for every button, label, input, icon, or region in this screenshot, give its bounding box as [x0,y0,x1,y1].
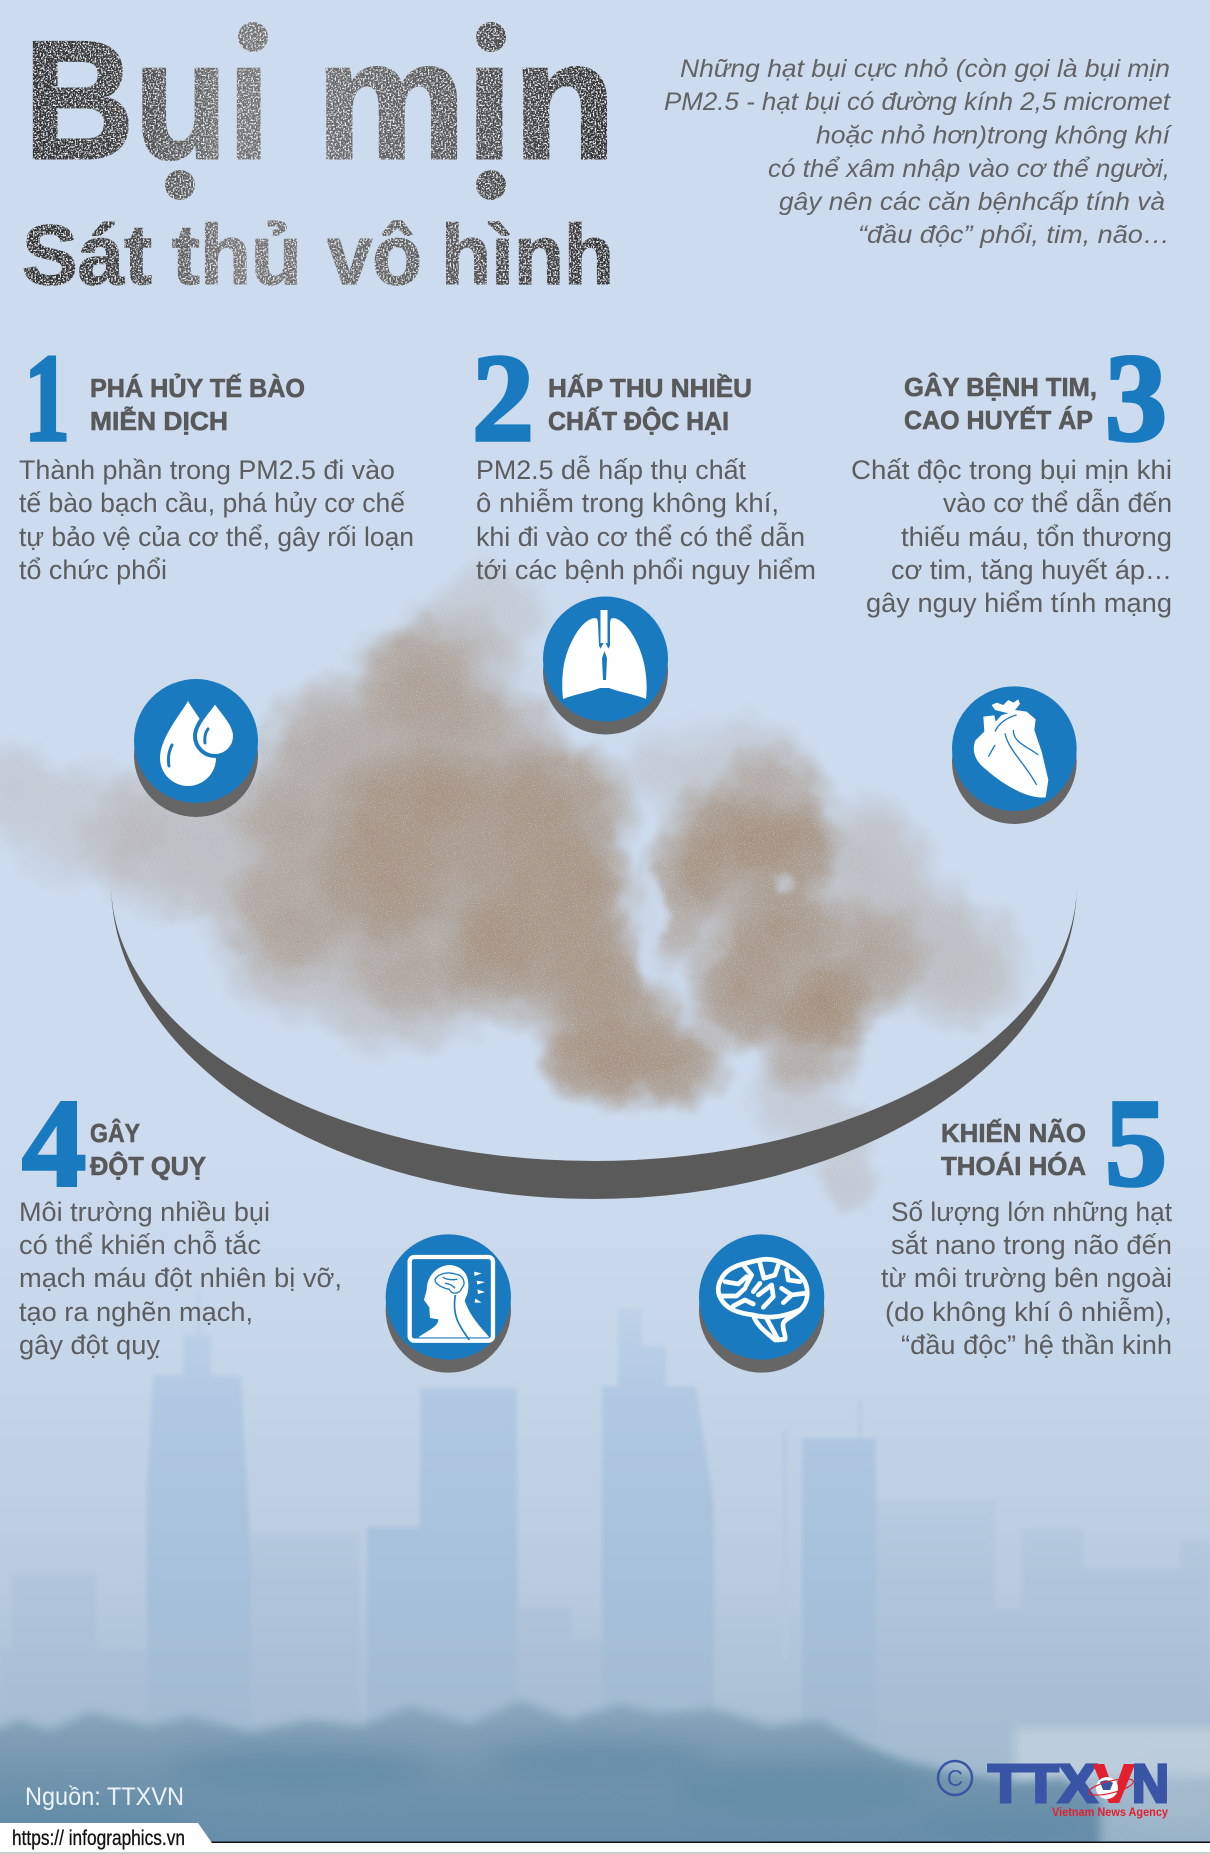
text 5: từ môi trường bên ngoài [881,1263,1172,1293]
heading 5 [941,1118,1086,1181]
icon: water drops [134,679,258,817]
heading 5: KHIẾN NÃO [941,1118,1086,1148]
title line 2: Sát [22,208,152,302]
text 1: tổ chức phổi [19,555,167,585]
heading 3: CAO HUYẾT ÁP [904,405,1093,435]
text 4: có thể khiến chỗ tắc [19,1229,261,1260]
text 3: cơ tim, tăng huyết áp… [891,555,1172,585]
copyright mark [938,1761,972,1795]
title line 1: mịn [316,6,616,194]
heading 3: GÂY BỆNH TIM, [904,372,1097,402]
item 3: heart disease [851,330,1172,618]
intro paragraph: hoặc nhỏ hơn)trong không khí [816,122,1172,150]
intro paragraph: có thể xâm nhập vào cơ thể người, [768,155,1170,183]
heading 1: PHÁ HỦY TẾ BÀO [90,372,305,403]
icon: brain [699,1234,824,1373]
icon: lungs [543,596,668,734]
intro paragraph: PM2.5 - hạt bụi có đường kính 2,5 micromet [664,88,1171,116]
text 1: tế bào bạch cầu, phá hủy cơ chế [19,488,405,518]
title [24,22,610,286]
icon: heart [952,686,1077,824]
text 1 [19,455,414,585]
number 1: 1 [24,330,70,468]
heading 4 [90,1118,206,1181]
number 3: 3 [1105,330,1167,468]
background: treeline and river [0,1700,1210,1854]
intro paragraph [664,55,1172,249]
text 3: vào cơ thể dẫn đến [943,487,1172,518]
text 3: gây nguy hiểm tính mạng [866,588,1172,618]
title line 1: Bụi [24,6,270,194]
dust cloud [0,555,1035,1215]
text 3 [851,455,1172,618]
title line 1 [32,22,608,200]
text 2: PM2.5 dễ hấp thụ chất [476,454,746,485]
text 3: thiếu máu, tổn thương [901,522,1172,552]
heading 1 [90,372,305,436]
url text: https:// infographics.vn [12,1827,185,1850]
heading 2 [548,373,752,436]
text 1: tự bảo vệ của cơ thể, gây rối loạn [19,522,414,552]
text 5: Số lượng lớn những hạt [891,1197,1172,1227]
text 2 [476,454,816,585]
text 4: mạch máu đột nhiên bị vỡ, [19,1263,342,1293]
text 4: Môi trường nhiều bụi [19,1197,270,1227]
item 1: destroys immune cells [19,330,414,585]
text 1: Thành phần trong PM2.5 đi vào [19,455,395,485]
text 2: khi đi vào cơ thể có thể dẫn [476,521,805,552]
text 4 [19,1197,342,1360]
intro paragraph: “đầu độc” phổi, tim, não… [858,221,1170,249]
item 2: absorbs toxins [472,330,816,585]
wordmark: TTX [988,1754,1097,1814]
logo: TTXVN: V [1094,1754,1134,1814]
heading 2: HẤP THU NHIỀU [548,373,752,403]
text 3: Chất độc trong bụi mịn khi [851,455,1172,485]
text 2: tới các bệnh phổi nguy hiểm [476,555,816,585]
curved bowl arc [111,883,1077,1199]
logo: TTXVN: C [947,1765,963,1791]
logo: TTXVN [938,1754,1169,1819]
heading 2: CHẤT ĐỘC HẠI [548,406,729,436]
background: hazy city skyline [0,1290,1210,1744]
number 2: 2 [472,330,534,468]
title line 2: hình [441,208,614,302]
globe [1096,1777,1118,1799]
heading 5: THOÁI HÓA [941,1151,1086,1181]
url tag [0,1823,212,1852]
icon: head with stroke scan [386,1234,511,1373]
heading 3 [904,372,1097,435]
heading 4: GÂY [90,1118,140,1148]
tagline: Vietnam News Agency [1052,1805,1168,1819]
text 4: tạo ra nghẽn mạch, [19,1297,253,1327]
intro paragraph: Những hạt bụi cực nhỏ (còn gọi là bụi mịn [680,55,1170,83]
text 5: sắt nano trong não đến [891,1229,1172,1260]
text 5: “đầu độc” hệ thần kinh [901,1330,1172,1360]
text 5 [881,1197,1172,1360]
number 4: 4 [22,1075,86,1213]
text 5: (do không khí ô nhiễm), [885,1296,1172,1327]
item 4: stroke [19,1075,342,1360]
text 4: gây đột quỵ [19,1330,160,1360]
text 2: ô nhiễm trong không khí, [476,487,779,518]
title line 2 [22,208,614,302]
title line 2: thủ [172,208,302,302]
heading 1: MIỄN DỊCH [90,406,228,436]
intro paragraph: gây nên các căn bệnhcấp tính và [779,188,1165,216]
title line 2: vô [327,208,422,302]
item 5: brain degeneration [881,1075,1172,1360]
footer strip [0,1823,1210,1854]
logo: TTXVN: N [1132,1754,1169,1814]
source line: Nguồn: TTXVN [25,1783,184,1811]
number 5: 5 [1105,1075,1167,1213]
heading 4: ĐỘT QUỴ [90,1151,206,1181]
